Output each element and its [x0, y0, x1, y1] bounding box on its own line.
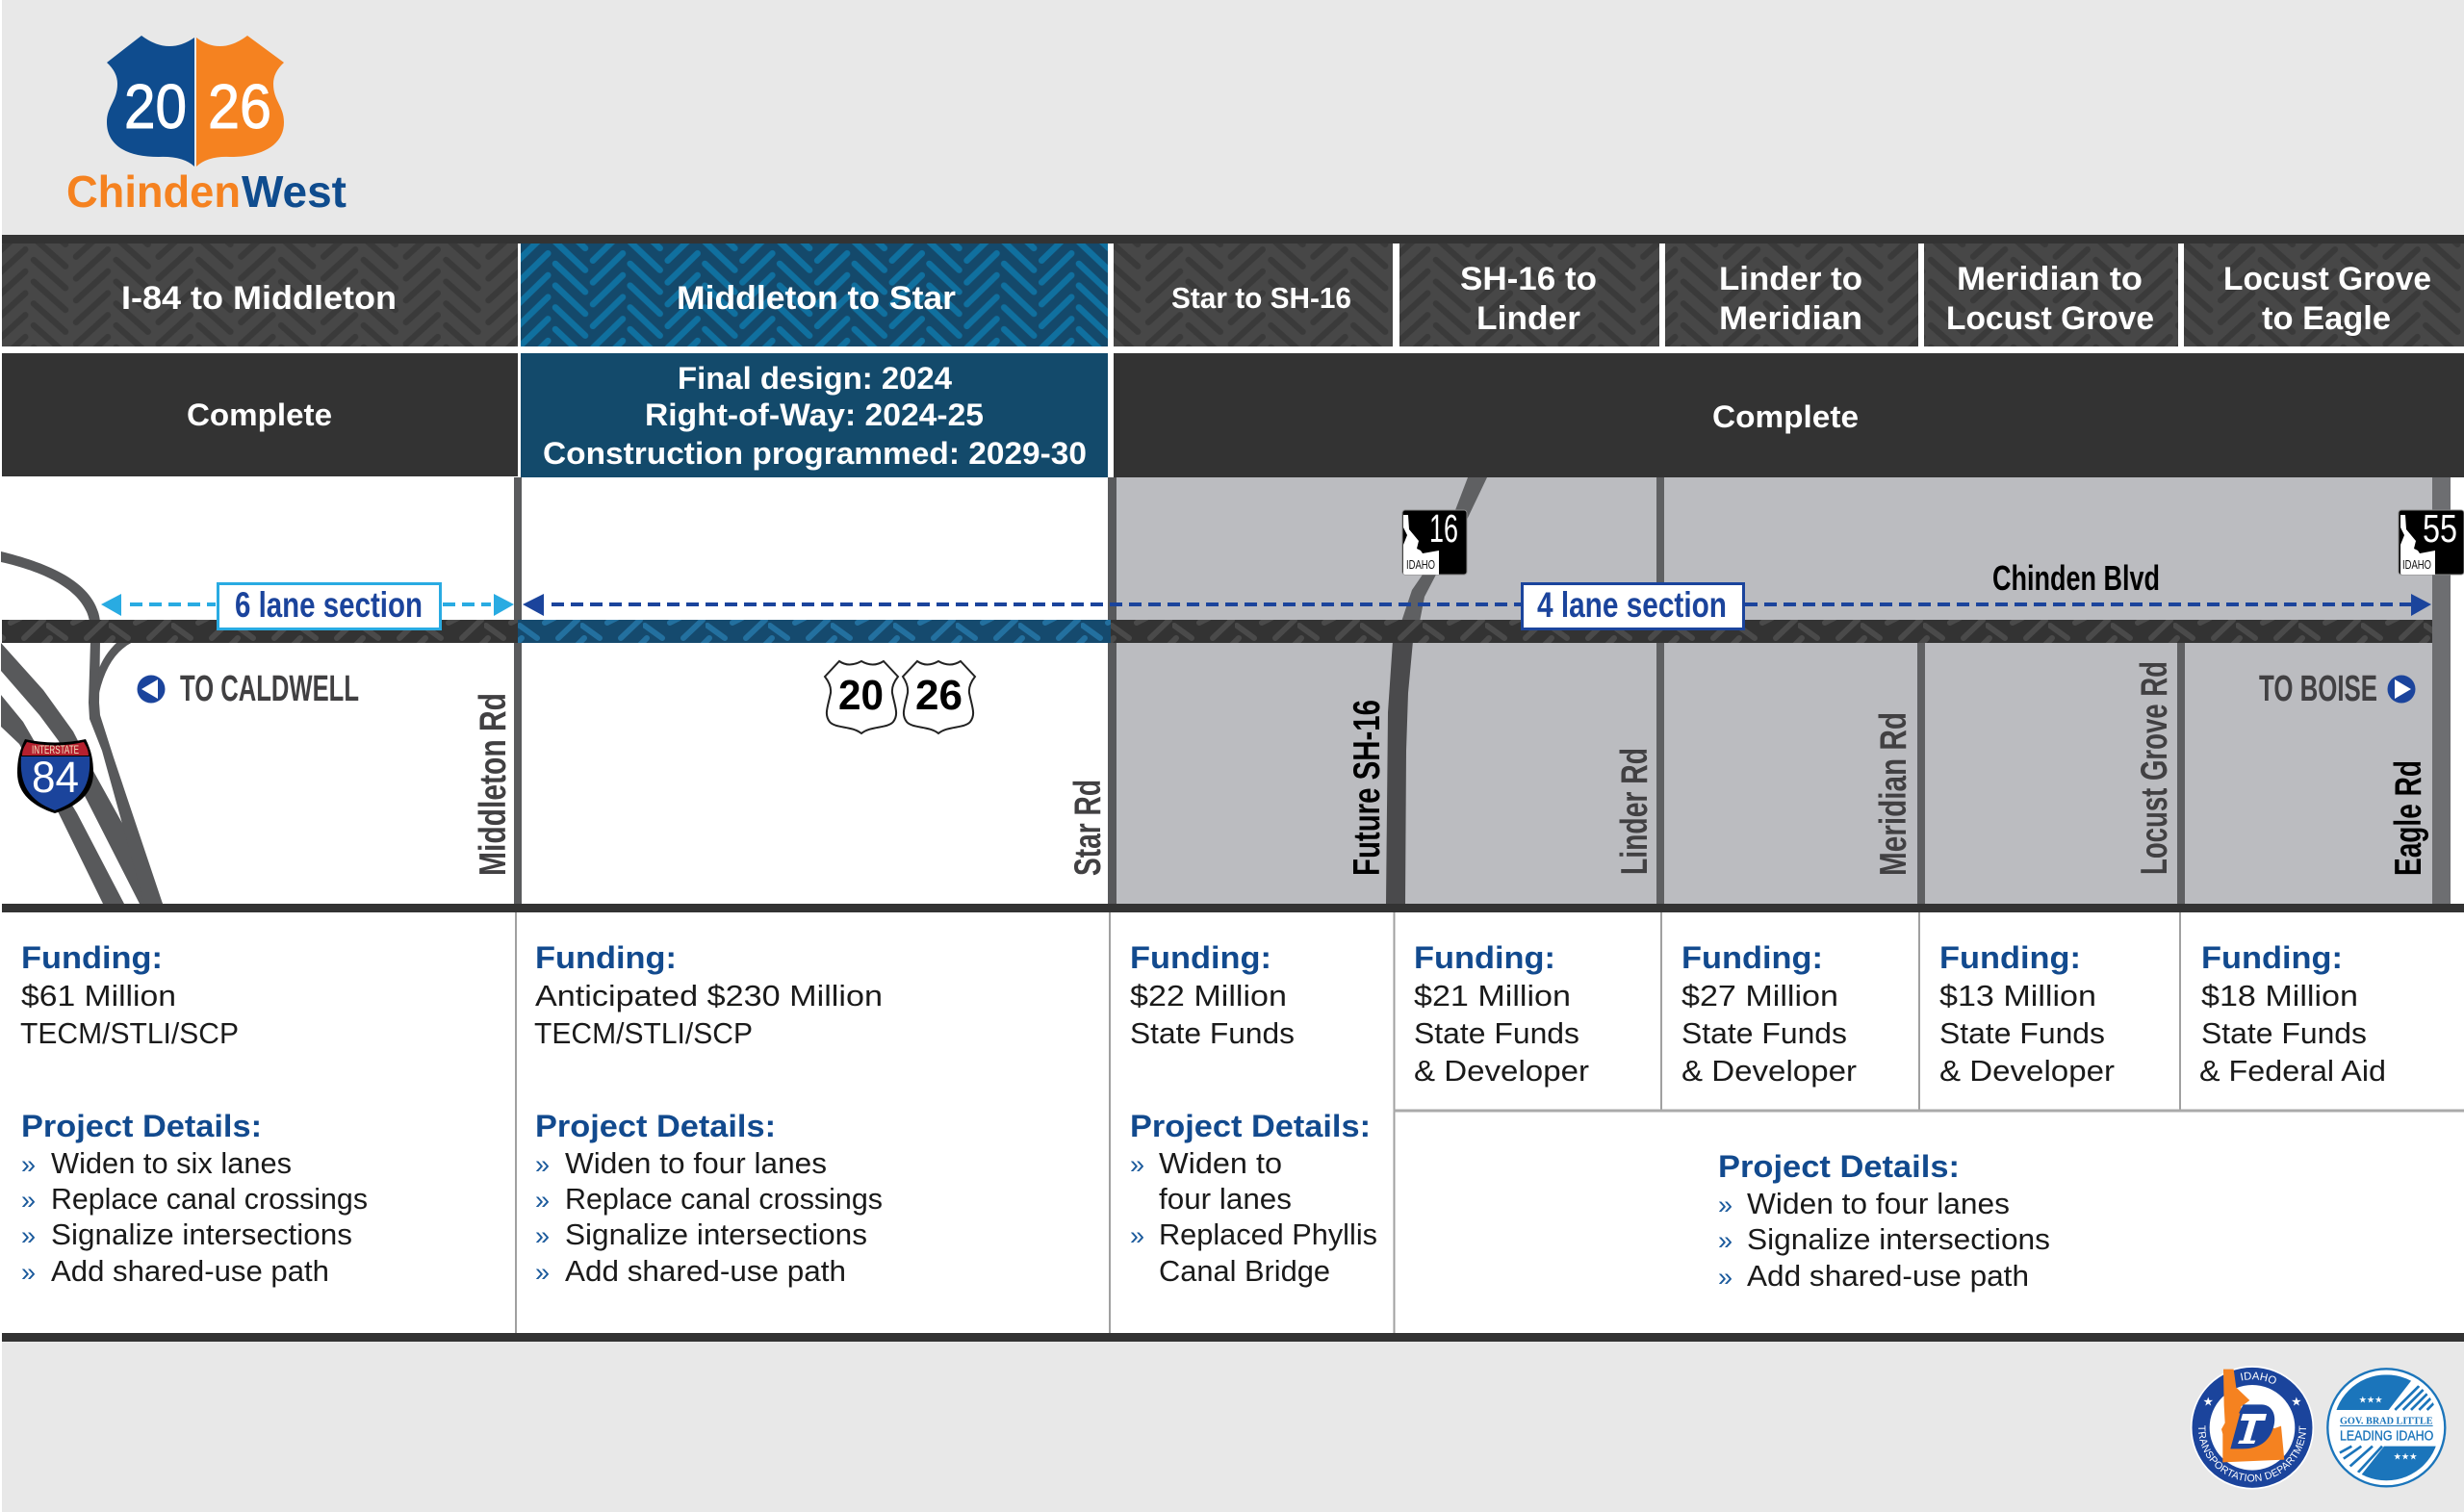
status row: Complete	[187, 397, 332, 432]
panel: Middleton to Star: Anticipated $230 Million	[535, 979, 883, 1012]
panel: SH-16 to Linder funding: $21 Million	[1414, 979, 1571, 1012]
header row: segment names: Locust Grove	[1946, 300, 2154, 337]
panel: I-84 to Middleton: Replace canal crossings	[51, 1182, 368, 1216]
panel: Star to SH-16: State Funds	[1130, 1016, 1295, 1050]
icon: Idaho 55 sign	[2399, 506, 2464, 575]
icon: US 26 shield: 26	[915, 672, 962, 719]
logo: Gov. Brad Little Leading Idaho: LEADING IDAHO	[2340, 1429, 2433, 1445]
status row: Final design: 2024	[678, 361, 952, 396]
icon: Interstate 84 shield	[17, 739, 93, 813]
cross road: Eagle Rd	[2432, 477, 2451, 904]
panel: Locust Grove to Eagle funding: $18 Million	[2201, 979, 2358, 1012]
cross road: Meridian Rd	[1917, 643, 1925, 904]
status row: Construction programmed: 2029-30	[543, 436, 1087, 471]
header row: segment names: Middleton to Star	[677, 280, 956, 317]
logo: Idaho Transportation Department: ★	[2203, 1396, 2214, 1409]
label: Chinden Blvd: Chinden Blvd	[1992, 558, 2160, 598]
panel: shared project details: Widen to four lanes	[1747, 1187, 2010, 1220]
road label: Locust Grove Rd: Locust Grove Rd	[2134, 661, 2175, 875]
logo: Gov. Brad Little Leading Idaho: ★★★	[2359, 1395, 2382, 1404]
road label: Future SH-16: Future SH-16	[1347, 700, 1388, 876]
panel: Middleton to Star: »	[535, 1150, 550, 1179]
header row: segment names: Linder to	[1719, 261, 1862, 297]
logo: Idaho Transportation Department: TRANSPORTATION DEPARTMENT	[2198, 1425, 2306, 1482]
logo: Chinden West	[66, 36, 346, 217]
bottom bar of map	[2, 904, 2464, 912]
header row: segment names: SH-16 to	[1460, 261, 1597, 297]
panel: Meridian to Locust Grove funding: State Funds	[1939, 1016, 2105, 1050]
road label: Meridian Rd: Meridian Rd	[1873, 712, 1914, 876]
logo: Gov. Brad Little Leading Idaho: GOV. BRAD LITTLE	[2340, 1415, 2433, 1426]
panel: Linder to Meridian funding: & Developer	[1681, 1054, 1857, 1088]
panel: Linder to Meridian funding	[1681, 940, 1857, 1088]
panel: Star to SH-16: $22 Million	[1130, 979, 1287, 1012]
road label: Linder Rd: Linder Rd	[1614, 748, 1656, 875]
status row: Complete	[1712, 399, 1859, 434]
panel: Star to SH-16: Replaced Phyllis	[1159, 1217, 1377, 1251]
panel: shared project details: Project Details:	[1718, 1149, 1960, 1184]
header row: segment names: Linder	[1476, 300, 1580, 337]
header row: segment names: I-84 to Middleton	[121, 280, 397, 317]
logo: Chinden West: 20	[124, 71, 187, 141]
panel: shared project details	[1718, 1149, 2050, 1293]
icon: Idaho 55 sign: IDAHO	[2402, 557, 2431, 572]
status row: Right-of-Way: 2024-25	[645, 397, 984, 432]
panel: Star to SH-16: »	[1130, 1150, 1144, 1179]
cross road: Locust Grove Rd	[2177, 643, 2185, 904]
panel: Middleton to Star: »	[535, 1186, 550, 1215]
panel: Locust Grove to Eagle funding	[2199, 940, 2386, 1088]
logo: Gov. Brad Little Leading Idaho	[2327, 1369, 2445, 1486]
panel: Middleton to Star: TECM/STLI/SCP	[534, 1016, 753, 1050]
header row: segment names: Locust Grove	[2223, 261, 2431, 297]
panel: Middleton to Star: Signalize intersections	[565, 1217, 867, 1251]
cross road: future SH-16	[1386, 477, 1487, 904]
logo: Idaho Transportation Department: ★	[2291, 1396, 2302, 1409]
panel: Middleton to Star: »	[535, 1258, 550, 1287]
4 lane section arrow	[523, 583, 2431, 629]
panel: Star to SH-16: Project Details:	[1130, 1109, 1371, 1143]
panel: Linder to Meridian funding: State Funds	[1681, 1016, 1847, 1050]
panel: Meridian to Locust Grove funding: & Developer	[1939, 1054, 2115, 1088]
header row: segment names: Meridian	[1719, 300, 1862, 337]
panel: Star to SH-16: »	[1130, 1221, 1144, 1250]
table dividers	[516, 912, 2464, 1333]
panel: Middleton to Star: »	[535, 1221, 550, 1250]
logo: Chinden West: West	[242, 167, 346, 217]
logo: Gov. Brad Little Leading Idaho: ★★★	[2394, 1452, 2417, 1462]
panel: I-84 to Middleton: TECM/STLI/SCP	[20, 1016, 239, 1050]
direction: to Caldwell	[137, 669, 359, 709]
direction: to Boise: TO BOISE	[2259, 669, 2377, 709]
panel: Middleton to Star	[534, 940, 883, 1288]
interchange ramps at I-84	[1, 551, 163, 904]
cross road: Star Rd	[1108, 477, 1116, 904]
panel: I-84 to Middleton: »	[21, 1258, 36, 1287]
panel: I-84 to Middleton: Add shared-use path	[51, 1254, 329, 1288]
panel: SH-16 to Linder funding: & Developer	[1414, 1054, 1589, 1088]
panel: shared project details: Signalize intersections	[1747, 1222, 2050, 1256]
panel: SH-16 to Linder funding: Funding:	[1414, 940, 1555, 975]
panel: Linder to Meridian funding: Funding:	[1681, 940, 1823, 975]
panel: Locust Grove to Eagle funding: & Federal Aid	[2199, 1054, 2386, 1088]
panel: Star to SH-16: Widen to	[1159, 1146, 1282, 1180]
icon: Idaho 16 sign: 16	[1429, 506, 1458, 551]
panel: I-84 to Middleton: Funding:	[21, 940, 163, 975]
panel: Middleton to Star: Funding:	[535, 940, 677, 975]
panel: Locust Grove to Eagle funding: State Funds	[2201, 1016, 2367, 1050]
panel: SH-16 to Linder funding	[1414, 940, 1589, 1088]
logo: Idaho Transportation Department	[2191, 1366, 2314, 1490]
panel: I-84 to Middleton: »	[21, 1186, 36, 1215]
panel: I-84 to Middleton: Widen to six lanes	[51, 1146, 292, 1180]
panel: I-84 to Middleton: $61 Million	[21, 979, 176, 1012]
road label: Star Rd: Star Rd	[1067, 780, 1109, 876]
logo: Chinden West: Chinden	[66, 167, 241, 217]
panel: shared project details: »	[1718, 1226, 1732, 1255]
icon: US 20 shield: 20	[838, 672, 884, 719]
road label: Middleton Rd: Middleton Rd	[473, 693, 514, 876]
logo: Idaho Transportation Department: IDAHO	[2241, 1372, 2276, 1384]
icon: Interstate 84 shield: 84	[32, 753, 79, 802]
logo: Chinden West: 26	[208, 71, 271, 141]
cross road: Linder Rd	[1656, 477, 1664, 904]
panel: Star to SH-16: four lanes	[1159, 1182, 1292, 1216]
panel: Middleton to Star: Add shared-use path	[565, 1254, 846, 1288]
panel: Linder to Meridian funding: $27 Million	[1681, 979, 1838, 1012]
panel: I-84 to Middleton	[20, 940, 368, 1288]
bottom bar	[2, 1333, 2464, 1342]
header row: segment names	[2, 243, 2464, 346]
panel: Meridian to Locust Grove funding: $13 Million	[1939, 979, 2096, 1012]
panel: Star to SH-16: Canal Bridge	[1159, 1254, 1330, 1288]
direction: to Caldwell: TO CALDWELL	[180, 669, 359, 709]
panel: Middleton to Star: Replace canal crossings	[565, 1182, 883, 1216]
corridor map	[1, 477, 2464, 904]
6 lane section arrow	[101, 583, 514, 629]
icon: Interstate 84 shield: INTERSTATE	[32, 743, 79, 756]
panel: Middleton to Star: Widen to four lanes	[565, 1146, 827, 1180]
top dark bar	[2, 235, 2464, 243]
icon: Idaho 16 sign: IDAHO	[1406, 557, 1435, 572]
panel: Star to SH-16	[1130, 940, 1377, 1288]
6 lane section arrow: 6 lane section	[235, 585, 423, 625]
panel: shared project details: Add shared-use path	[1747, 1259, 2029, 1293]
panel: Meridian to Locust Grove funding: Funding:	[1939, 940, 2081, 975]
road label: Eagle Rd: Eagle Rd	[2388, 760, 2429, 876]
panel: Meridian to Locust Grove funding	[1939, 940, 2115, 1088]
panel: I-84 to Middleton: »	[21, 1221, 36, 1250]
cross road: Middleton Rd	[514, 477, 522, 904]
icon: US 20 shield	[825, 661, 898, 733]
mainline road band	[2, 620, 2432, 643]
panel: I-84 to Middleton: »	[21, 1150, 36, 1179]
header row: segment names: Meridian to	[1957, 261, 2143, 297]
developed section background	[1114, 477, 2433, 904]
panel: shared project details: »	[1718, 1191, 1732, 1219]
panel: Star to SH-16: Funding:	[1130, 940, 1271, 975]
icon: Idaho 16 sign	[1402, 506, 1467, 575]
header row: segment names: Star to SH-16	[1171, 281, 1351, 315]
panel: Middleton to Star: Project Details:	[535, 1109, 776, 1143]
header row: segment names: to Eagle	[2262, 300, 2391, 337]
panel: I-84 to Middleton: Project Details:	[21, 1109, 262, 1143]
4 lane section arrow: 4 lane section	[1537, 585, 1727, 625]
panel: SH-16 to Linder funding: State Funds	[1414, 1016, 1579, 1050]
panel: Locust Grove to Eagle funding: Funding:	[2201, 940, 2343, 975]
panel: I-84 to Middleton: Signalize intersections	[51, 1217, 352, 1251]
icon: US 26 shield	[903, 661, 975, 733]
status row	[2, 353, 2464, 477]
panel: shared project details: »	[1718, 1263, 1732, 1292]
